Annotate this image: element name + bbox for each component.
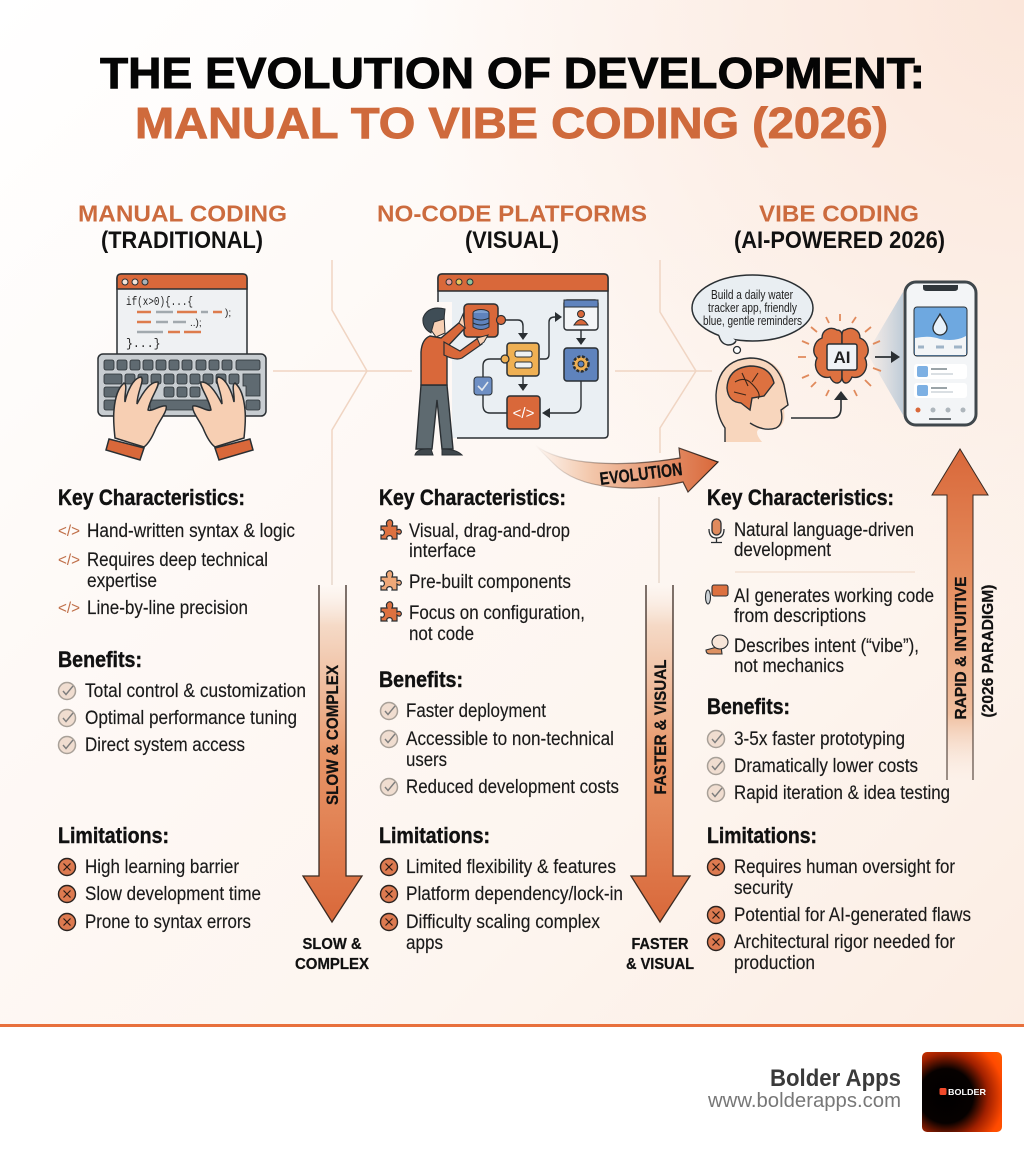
column heading: vibe coding: (AI-POWERED 2026) bbox=[734, 227, 945, 254]
title bbox=[100, 49, 925, 148]
column heading: no-code platforms: (VISUAL) bbox=[465, 227, 559, 254]
illustration: code window, keyboard and typing hands: ..); bbox=[190, 318, 202, 329]
benefits: Direct system access bbox=[85, 735, 245, 756]
arrow: slow and complex bbox=[295, 585, 369, 973]
person bbox=[415, 308, 488, 455]
logo bbox=[922, 1052, 1002, 1132]
arrow: rapid and intuitive: RAPID & INTUITIVE bbox=[953, 576, 970, 720]
key characteristics: not mechanics bbox=[734, 656, 844, 677]
limitations: Prone to syntax errors bbox=[85, 912, 251, 933]
illustration: code window, keyboard and typing hands: if(x>0){...{ bbox=[126, 296, 193, 309]
limitations: Potential for AI-generated flaws bbox=[734, 905, 971, 926]
benefits: Faster deployment bbox=[406, 701, 547, 722]
arrow: rapid and intuitive: (2026 PARADIGM) bbox=[980, 584, 997, 718]
limitations: Limitations: bbox=[707, 823, 817, 848]
limitations: Limitations: bbox=[379, 823, 490, 848]
illustration: no-code window with person and flow blocks: </> bbox=[513, 405, 535, 422]
key characteristics: Pre-built components bbox=[409, 572, 571, 593]
key characteristics: Line-by-line precision bbox=[87, 598, 248, 619]
key characteristics: Key Characteristics: bbox=[707, 485, 894, 510]
key characteristics: Describes intent (“vibe”), bbox=[734, 636, 919, 657]
limitations: Limited flexibility & features bbox=[406, 857, 616, 878]
key characteristics: </> bbox=[58, 600, 80, 617]
column heading: vibe coding: VIBE CODING bbox=[759, 200, 919, 226]
illustration: prompt bubble, head, AI brain and phone: Build a daily water bbox=[711, 288, 793, 302]
limitations bbox=[58, 823, 261, 933]
key characteristics: development bbox=[734, 540, 832, 561]
benefits: 3-5x faster prototyping bbox=[734, 729, 905, 750]
arrow: slow and complex: COMPLEX bbox=[295, 956, 369, 973]
key characteristics: AI generates working code bbox=[734, 586, 934, 607]
footer url: www.bolderapps.com bbox=[707, 1090, 901, 1112]
panel: vibe coding details bbox=[706, 485, 971, 974]
limitations: Architectural rigor needed for bbox=[734, 932, 956, 953]
limitations: security bbox=[734, 878, 793, 899]
arrow: faster and visual: & VISUAL bbox=[626, 956, 694, 973]
benefits bbox=[58, 647, 306, 756]
key characteristics bbox=[706, 485, 934, 677]
arrow: slow and complex: SLOW & bbox=[302, 936, 362, 953]
key characteristics: </> bbox=[58, 523, 80, 540]
column heading: manual coding: (TRADITIONAL) bbox=[101, 227, 263, 254]
key characteristics: not code bbox=[409, 624, 474, 645]
icon: chat with code bbox=[706, 585, 728, 604]
illustration: prompt bubble, head, AI brain and phone: tracker app, friendly bbox=[708, 301, 798, 315]
key characteristics: expertise bbox=[87, 571, 157, 592]
limitations bbox=[379, 823, 623, 954]
logo: BOLDER bbox=[948, 1087, 986, 1097]
illustration: code window, keyboard and typing hands bbox=[98, 274, 266, 460]
limitations bbox=[707, 823, 971, 974]
footer brand name: Bolder Apps bbox=[770, 1065, 901, 1092]
key characteristics: Visual, drag-and-drop bbox=[409, 521, 570, 542]
icon: microphone bbox=[709, 519, 724, 542]
limitations: Platform dependency/lock-in bbox=[406, 884, 623, 905]
limitations: Limitations: bbox=[58, 823, 169, 848]
benefits: Total control & customization bbox=[85, 681, 306, 702]
limitations: Requires human oversight for bbox=[734, 857, 956, 878]
key characteristics: interface bbox=[409, 541, 476, 562]
arrow: slow and complex: SLOW & COMPLEX bbox=[323, 664, 342, 805]
illustration: prompt bubble, head, AI brain and phone: blue, gentle reminders bbox=[703, 314, 802, 328]
illustration: prompt bubble, head, AI brain and phone bbox=[692, 275, 976, 442]
column heading: no-code platforms bbox=[377, 200, 647, 254]
key characteristics: Natural language-driven bbox=[734, 520, 914, 541]
key characteristics: Key Characteristics: bbox=[58, 485, 245, 510]
illustration: prompt bubble, head, AI brain and phone: AI bbox=[834, 348, 850, 367]
illustration: code window, keyboard and typing hands: ); bbox=[225, 308, 231, 319]
key characteristics: </> bbox=[58, 552, 80, 569]
column heading: manual coding: MANUAL CODING bbox=[78, 200, 287, 226]
icon: speech bubbles bbox=[706, 635, 728, 654]
benefits: Benefits: bbox=[707, 694, 790, 719]
column heading: no-code platforms: NO-CODE PLATFORMS bbox=[377, 200, 647, 226]
column heading: vibe coding bbox=[734, 200, 945, 254]
arrow: faster and visual: FASTER & VISUAL bbox=[651, 660, 670, 794]
key characteristics: from descriptions bbox=[734, 606, 866, 627]
limitations: High learning barrier bbox=[85, 857, 240, 878]
limitations: Slow development time bbox=[85, 884, 261, 905]
key characteristics: Focus on configuration, bbox=[409, 603, 585, 624]
arrow: evolution: EVOLUTION bbox=[599, 459, 683, 489]
panel: manual coding details bbox=[58, 485, 306, 933]
benefits: Accessible to non-technical bbox=[406, 729, 614, 750]
benefits: Benefits: bbox=[58, 647, 142, 672]
limitations: production bbox=[734, 953, 815, 974]
benefits: Rapid iteration & idea testing bbox=[734, 783, 950, 804]
key characteristics: Key Characteristics: bbox=[379, 485, 566, 510]
panel: no-code details bbox=[379, 485, 623, 954]
illustration: no-code window with person and flow blocks bbox=[415, 274, 608, 455]
benefits: users bbox=[406, 750, 447, 771]
key characteristics: Requires deep technical bbox=[87, 550, 268, 571]
arrow: rapid and intuitive bbox=[932, 449, 997, 780]
benefits bbox=[707, 694, 950, 804]
arrow: faster and visual: FASTER bbox=[632, 936, 689, 953]
footer bbox=[0, 1024, 1024, 1132]
key characteristics bbox=[58, 485, 295, 619]
limitations: apps bbox=[406, 933, 443, 954]
key characteristics bbox=[379, 485, 585, 645]
limitations: Difficulty scaling complex bbox=[406, 912, 600, 933]
arrow: evolution bbox=[535, 445, 718, 492]
benefits: Optimal performance tuning bbox=[85, 708, 297, 729]
benefits: Benefits: bbox=[379, 667, 463, 692]
arrow: faster and visual bbox=[626, 585, 694, 973]
illustration: code window, keyboard and typing hands: }...} bbox=[126, 338, 161, 351]
title: THE EVOLUTION OF DEVELOPMENT: bbox=[100, 49, 925, 98]
benefits: Dramatically lower costs bbox=[734, 756, 918, 777]
benefits bbox=[379, 667, 619, 798]
column heading: manual coding bbox=[78, 200, 287, 254]
benefits: Reduced development costs bbox=[406, 777, 619, 798]
key characteristics: Hand-written syntax & logic bbox=[87, 521, 295, 542]
title: MANUAL TO VIBE CODING (2026) bbox=[135, 99, 888, 148]
